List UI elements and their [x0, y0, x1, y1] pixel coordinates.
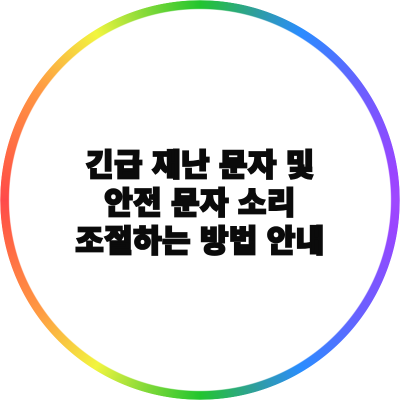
title	[75, 148, 325, 259]
title: 조절하는 방법 안내	[75, 224, 325, 259]
title: 긴급 재난 문자 및	[85, 148, 315, 183]
title: 안전 문자 소리	[104, 186, 296, 221]
